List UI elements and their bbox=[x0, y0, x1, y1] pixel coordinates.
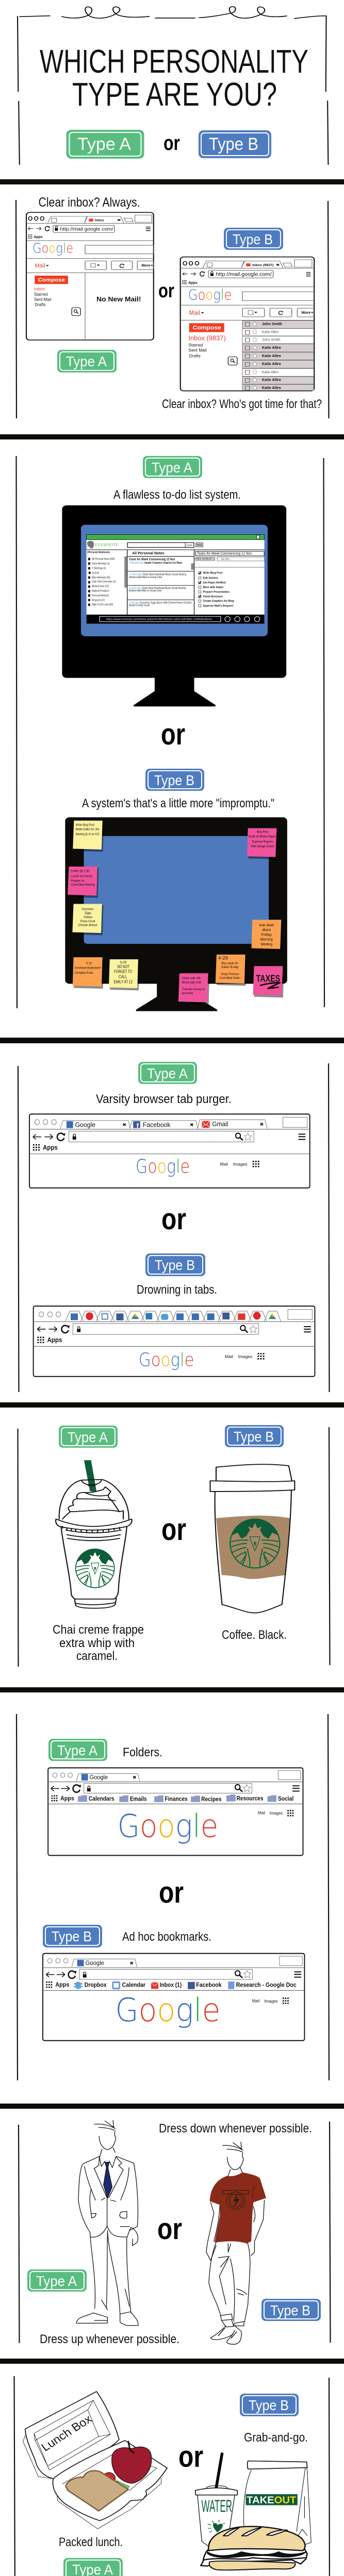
email rows: Katie Allen bbox=[262, 353, 281, 358]
email rows: John Smith bbox=[262, 337, 281, 342]
browser: clean gmail inbox: Inbox bbox=[34, 286, 45, 291]
browser: folders bookmark bar: Recipes bbox=[201, 1796, 222, 1803]
browser: ad hoc bookmark bar: Google bbox=[85, 1960, 104, 1967]
sub sandwich bbox=[201, 2527, 307, 2570]
water cup: WATER bbox=[202, 2497, 232, 2516]
sticky note: yellow groceries: Eggs bbox=[85, 911, 91, 915]
browser: clean gmail inbox: Drafts bbox=[35, 302, 46, 307]
sticky note: pink pay stub: accounts bbox=[182, 991, 193, 995]
browser: three tabs bbox=[29, 1114, 310, 1188]
browser: folders bookmark bar: Mail bbox=[258, 1810, 265, 1816]
browser: many tabs: Google bbox=[139, 1350, 194, 1371]
note list: Clean Desk Download Music Social Sharing bbox=[142, 587, 186, 590]
badge: Type A tabs bbox=[138, 1062, 197, 1084]
or: or bbox=[159, 1876, 184, 1909]
badge: Type A dress: Type A bbox=[36, 2273, 77, 2289]
sticky note: orange brainstorm: 4-15 bbox=[86, 961, 92, 965]
open note checklist: Write Blog Post bbox=[203, 572, 222, 575]
bookmark folders bbox=[78, 1794, 276, 1802]
badge: Type A inbox: Type A bbox=[66, 353, 107, 369]
badge: Type B lunch: Type B bbox=[249, 2397, 289, 2413]
badge: Type A to-do bbox=[143, 456, 202, 478]
browser: ad hoc bookmark bar: Inbox (1) bbox=[160, 1982, 182, 1989]
or: or bbox=[158, 280, 174, 302]
sticky note: pink pay stub: Check with HR bbox=[182, 976, 201, 980]
browser: many tabs: Mail bbox=[225, 1354, 233, 1359]
badge: Type A inbox bbox=[57, 350, 117, 372]
title bbox=[40, 43, 308, 113]
sticky note: orange karen: Buy cards for bbox=[222, 961, 238, 965]
sticky note: yellow do not forget: FORGET TO bbox=[114, 969, 132, 974]
open note checklist: Main Notebook ∨ bbox=[196, 557, 214, 561]
header badge: Type A: Type A bbox=[77, 134, 131, 154]
browser: folders bookmark bar: Finances bbox=[165, 1795, 188, 1803]
open note checklist: Tasks for Week Commencing 12 Nov bbox=[197, 551, 252, 555]
sidebar notebooks: Research (47) bbox=[92, 599, 105, 602]
or: or bbox=[161, 1202, 186, 1236]
browser: overflowing gmail inbox bbox=[181, 257, 314, 391]
note list: Buttons Add Mike to Group Chat bbox=[129, 576, 162, 579]
browser: folders bookmark bar: Social bbox=[278, 1795, 293, 1802]
sticky note: orange ask matt: Meeting bbox=[261, 942, 272, 946]
sticky note: yellow blog: Write Blog Post bbox=[76, 822, 95, 827]
sticky note: pink taxes bbox=[253, 966, 284, 997]
badge: Type B lunch bbox=[240, 2394, 299, 2416]
sticky note: yellow do not forget: 5-09 bbox=[120, 961, 126, 964]
badge: Type A lunch bbox=[63, 2558, 123, 2576]
illustration: frappe cup bbox=[56, 1460, 132, 1608]
tab favicons bbox=[71, 1312, 276, 1320]
browser: folders bookmark bar: Emails bbox=[130, 1795, 147, 1803]
sticky note: orange ask matt bbox=[252, 920, 283, 951]
browser: three tabs: Google bbox=[75, 1121, 95, 1128]
browser: folders bookmark bar: Images bbox=[270, 1811, 283, 1816]
badge: Type A tabs: Type A bbox=[147, 1065, 188, 1081]
browser: overflowing gmail inbox: Google bbox=[188, 287, 232, 303]
caption: dress up: Dress up whenever possible. bbox=[40, 2332, 179, 2346]
sticky note: yellow do not forget: CALL bbox=[119, 974, 127, 979]
illustration: lunch box: Lunch Box bbox=[39, 2412, 94, 2454]
note list: Bread Crumbs Sushi bbox=[129, 604, 150, 607]
sticky note: yellow groceries bbox=[72, 904, 103, 935]
sticky note: yellow do not forget bbox=[109, 959, 140, 990]
sticky note: yellow blog bbox=[73, 821, 104, 852]
browser: overflowing gmail inbox: Compose bbox=[193, 325, 221, 331]
caption: chai creme frappe: caramel. bbox=[76, 1649, 118, 1663]
badge: Type B to-do bbox=[145, 769, 204, 791]
header or: or bbox=[163, 132, 180, 155]
browser: folders bookmark bar: Apps bbox=[60, 1795, 74, 1802]
email rows: Katie Allen bbox=[262, 369, 279, 374]
sticky note: yellow groceries: Chicken Breast bbox=[78, 923, 97, 927]
badge: Type B bookmarks: Type B bbox=[52, 1928, 92, 1944]
monitor: evernote: https://www.evernote.com/Home.action#n=851e8eeee-a3e6-41ff-866c-2e9658a45e4a bbox=[106, 618, 212, 621]
browser: folders bookmark bar: Google bbox=[118, 1808, 218, 1845]
note list: All Personal Notes bbox=[132, 551, 165, 555]
sidebar notebooks: IT Meetings (4) bbox=[92, 567, 106, 570]
browser: three tabs: Images bbox=[233, 1162, 247, 1166]
note list bbox=[127, 551, 194, 607]
browser: clean gmail inbox bbox=[26, 212, 154, 340]
sidebar notebooks: Personal Notes(2) bbox=[92, 595, 109, 597]
caption: chai creme frappe: extra whip with bbox=[59, 1636, 135, 1650]
browser: three tabs: Mail bbox=[220, 1162, 228, 1166]
sticky note: pink pay stub: about pay stub bbox=[182, 980, 201, 984]
illustration: lunch box bbox=[23, 2392, 167, 2529]
header frame bbox=[18, 7, 328, 164]
sidebar notebooks: Media Events (79) bbox=[92, 585, 109, 588]
sticky note: yellow groceries: Cheese bbox=[84, 915, 92, 919]
browser: three tabs: f bbox=[137, 1122, 139, 1130]
inbox caption: type A: Clear inbox? Always. bbox=[38, 195, 140, 210]
takeout bag: TAKEOUT bbox=[247, 2495, 296, 2506]
browser: many tabs: Apps bbox=[47, 1336, 62, 1344]
caption: folders: Folders. bbox=[123, 1745, 162, 1759]
browser: clean gmail inbox: Inbox bbox=[95, 218, 104, 222]
sidebar notebooks: National Freelance bbox=[92, 590, 109, 592]
badge: Type A to-do: Type A bbox=[152, 460, 192, 476]
browser: folders bookmark bar: Calendars bbox=[89, 1795, 114, 1802]
browser: overflowing gmail inbox: Drafts bbox=[189, 353, 201, 359]
caption: dress down: Dress down whenever possible. bbox=[159, 2122, 312, 2136]
sticky note: orange ask matt: about bbox=[262, 928, 271, 932]
browser: ad hoc bookmark bar: Images bbox=[265, 1999, 278, 2004]
badge: Type A folders: Type A bbox=[57, 1742, 97, 1758]
open note checklist: Create Graphics for Blog bbox=[203, 600, 234, 603]
takeout bag bbox=[243, 2461, 311, 2545]
browser: ad hoc bookmark bar: Calendar bbox=[122, 1982, 145, 1989]
badge: Type B coffee: Type B bbox=[234, 1429, 274, 1445]
title: TYPE ARE YOU? bbox=[72, 76, 277, 113]
browser: overflowing gmail inbox: Mail bbox=[189, 310, 200, 316]
email rows: Katie Allen bbox=[262, 362, 281, 366]
browser: three tabs: Apps bbox=[43, 1144, 58, 1151]
badge: Type A dress bbox=[27, 2269, 87, 2292]
open note checklist: Finish Brochure bbox=[203, 595, 223, 598]
sticky note: orange karen: Karen B-day bbox=[221, 965, 239, 969]
badge: Type A folders bbox=[48, 1739, 107, 1761]
browser: three tabs: Google bbox=[136, 1156, 190, 1178]
sidebar notebooks: Journal bbox=[92, 572, 99, 575]
sticky note: pink coffee bbox=[68, 867, 99, 898]
sidebar notebooks: Chair Field Committee (4) bbox=[92, 581, 116, 583]
browser: clean gmail inbox: Sent Mail bbox=[34, 297, 51, 302]
caption: flawless to-do: A flawless to-do list system. bbox=[113, 488, 241, 502]
monitor: evernote: Search bbox=[186, 544, 192, 547]
browser: ad hoc bookmark bar bbox=[43, 1954, 304, 2041]
sticky note: pink white paper: Blog Post bbox=[257, 829, 268, 834]
badge: Type B to-do: Type B bbox=[154, 772, 194, 788]
browser: overflowing gmail inbox: http://mail.google.com/ bbox=[216, 272, 272, 277]
caption: packed lunch: Packed lunch. bbox=[59, 2535, 123, 2549]
sticky note: pink pay stub: Transfer money to bbox=[182, 987, 205, 991]
illustration: man in suit bbox=[76, 2121, 138, 2326]
note list: Groceries: Eggs Bacon Milk Cheese Ranch Chicken bbox=[140, 602, 192, 604]
browser: folders bookmark bar bbox=[48, 1768, 303, 1855]
sticky note: pink coffee: Coffee @ 2:30 bbox=[71, 869, 89, 873]
sticky note: yellow groceries: Groceries bbox=[81, 907, 94, 911]
browser: overflowing gmail inbox: Inbox (9837) bbox=[188, 334, 226, 342]
note list: 2 Hours Ago bbox=[129, 573, 141, 576]
badge: Type B dress bbox=[261, 2299, 321, 2321]
sticky note: yellow blog: Meeting @ 10 w/ ICG bbox=[76, 832, 100, 836]
note list: Tasks for Week Commencing 12 Nov bbox=[129, 558, 175, 562]
sticky note: pink white paper bbox=[247, 828, 278, 859]
browser: overflowing gmail inbox: More bbox=[301, 310, 311, 315]
sidebar notebooks: ▾Personal Notebooks bbox=[87, 551, 110, 554]
sticky note: orange ask matt: Morning bbox=[260, 937, 273, 941]
badge: Type B inbox: Type B bbox=[233, 231, 273, 247]
sticky note: orange brainstorm bbox=[73, 957, 104, 989]
sticky note: pink white paper: Web Design Check bbox=[251, 844, 274, 848]
browser: clean gmail inbox: Apps bbox=[34, 234, 43, 239]
illustration: black coffee cup bbox=[210, 1464, 294, 1613]
sidebar notebooks: All Personal Notes (400) bbox=[92, 558, 114, 561]
open note checklist bbox=[194, 551, 265, 607]
sticky note: pink coffee: Committee Meeting bbox=[71, 883, 95, 887]
sticky note: pink coffee: Lunch w/ Fanny bbox=[71, 874, 92, 878]
email rows: John Smith bbox=[262, 321, 282, 326]
sticky note: yellow groceries: Pizza Crust bbox=[80, 919, 95, 923]
or: or bbox=[157, 2212, 182, 2246]
sidebar notebooks: Daily To-Do Lists (50) bbox=[92, 603, 113, 606]
email rows: Katie Allen bbox=[262, 385, 281, 390]
browser: clean gmail inbox: Starred bbox=[34, 292, 47, 297]
monitor: evernote: Done bbox=[197, 544, 202, 547]
caption: tab purger: Varsity browser tab purger. bbox=[96, 1092, 232, 1106]
or: or bbox=[178, 2440, 203, 2473]
note list: Update Computer Organize Car Wash bbox=[144, 562, 182, 565]
sticky note: orange brainstorm: Schedule Brainstorm bbox=[75, 965, 101, 970]
email rows bbox=[242, 320, 314, 391]
header badge: Type B bbox=[199, 130, 271, 158]
browser: many tabs bbox=[34, 1306, 315, 1377]
caption: drowning in tabs: Drowning in tabs. bbox=[137, 1283, 217, 1297]
badge: Type A coffee: Type A bbox=[68, 1429, 108, 1445]
or: or bbox=[161, 718, 185, 751]
browser: overflowing gmail inbox: Apps bbox=[188, 280, 198, 285]
sticky note: orange karen: Committee Notes bbox=[219, 976, 240, 980]
browser: folders bookmark bar: Google bbox=[90, 1774, 108, 1781]
illustration: casual man bbox=[206, 2142, 266, 2344]
sticky note: yellow do not forget: DO NOT bbox=[118, 964, 129, 969]
bookmark icons bbox=[74, 1981, 234, 1989]
browser: clean gmail inbox: Compose bbox=[38, 278, 65, 283]
water cup bbox=[195, 2454, 237, 2548]
sticky note: orange brainstorm: Complete Evals bbox=[75, 970, 93, 975]
browser: ad hoc bookmark bar: Dropbox bbox=[85, 1982, 107, 1989]
browser: many tabs: Images bbox=[238, 1354, 252, 1359]
sticky note: orange karen: Study Previous bbox=[221, 972, 239, 976]
email rows: Katie Allen bbox=[262, 378, 281, 382]
browser: overflowing gmail inbox: Sent Mail bbox=[188, 348, 207, 353]
badge: Type B dress: Type B bbox=[270, 2302, 310, 2318]
browser: ad hoc bookmark bar: Google bbox=[115, 1991, 221, 2029]
caption: impromptu: A system's that's a little more "impromptu." bbox=[82, 796, 274, 810]
badge: Type A coffee bbox=[59, 1426, 118, 1448]
browser: ad hoc bookmark bar: Mail bbox=[252, 1998, 260, 2004]
caption: chai creme frappe bbox=[53, 1623, 144, 1663]
badge: Type B coffee bbox=[225, 1425, 284, 1447]
browser: ad hoc bookmark bar: Facebook bbox=[196, 1982, 222, 1989]
note list: Clean Desk Download Music Social Sharing bbox=[142, 573, 186, 576]
browser: clean gmail inbox: Mail bbox=[35, 262, 45, 269]
monitor: evernote: EVERNOTE bbox=[95, 542, 118, 547]
browser: three tabs: Gmail bbox=[212, 1121, 228, 1128]
caption: grab and go: Grab-and-go. bbox=[244, 2431, 308, 2445]
note list: 3 Minutes Ago bbox=[129, 562, 144, 565]
open note checklist: Edit Articles bbox=[203, 577, 218, 580]
badge: Type B tabs: Type B bbox=[155, 1257, 195, 1273]
browser: ad hoc bookmark bar: Research - Google Doc bbox=[236, 1982, 297, 1989]
browser: overflowing gmail inbox: Starred bbox=[188, 343, 203, 348]
sticky note: pink pay stub bbox=[178, 973, 209, 1005]
badge: Type B bookmarks bbox=[43, 1925, 102, 1947]
caption: ad hoc bookmarks: Ad hoc bookmarks. bbox=[122, 1930, 211, 1944]
sticky note: pink coffee: Prepare for bbox=[71, 878, 85, 883]
header badge: Type A bbox=[66, 130, 144, 159]
badge: Type B inbox bbox=[224, 228, 283, 250]
badge: Type B tabs bbox=[145, 1253, 205, 1276]
open note checklist: Get Paper Refilled bbox=[203, 582, 226, 584]
browser: folders bookmark bar: Resources bbox=[237, 1795, 264, 1802]
monitor: sticky notes bbox=[65, 817, 287, 1011]
browser: overflowing gmail inbox: Inbox (9837) bbox=[252, 263, 274, 267]
email rows: Katie Allen bbox=[262, 330, 279, 334]
browser: ad hoc bookmark bar: Apps bbox=[55, 1981, 70, 1988]
sticky note: pink white paper: Expense Reports bbox=[252, 839, 273, 843]
note list: Buttons Add Mike to Group Chat bbox=[129, 589, 161, 592]
sidebar notebooks: Main Notebook (54) bbox=[92, 577, 110, 579]
sticky note: orange karen: 4-29 bbox=[218, 956, 228, 961]
browser: three tabs: Facebook bbox=[143, 1121, 171, 1128]
sticky note: orange karen bbox=[216, 955, 247, 986]
t-shirt graphic bbox=[223, 2190, 249, 2209]
email rows: Katie Allen bbox=[262, 345, 281, 350]
sticky note: yellow do not forget: EMILY AT 12 bbox=[113, 979, 133, 984]
open note checklist: Meet with Adam bbox=[203, 586, 223, 589]
note list: 1 Day Ago bbox=[129, 602, 139, 604]
header badge: Type B: Type B bbox=[209, 134, 258, 154]
open note checklist: Approve Matt's Request bbox=[203, 604, 233, 607]
sticky note: orange ask matt: Ask Matt bbox=[259, 923, 274, 927]
sidebar notebooks: Client Meetings (3) bbox=[92, 563, 110, 565]
sticky note: pink white paper: Draft of White Paper bbox=[249, 834, 276, 838]
sticky note: yellow blog: Make Edits for Jim bbox=[76, 827, 100, 832]
browser: clean gmail inbox: No New Mail! bbox=[96, 296, 141, 303]
or: or bbox=[161, 1512, 186, 1547]
open note checklist: Prepare Presentation bbox=[203, 591, 230, 594]
sidebar notebooks bbox=[87, 551, 116, 606]
note list: 3 Hours Ago bbox=[129, 587, 141, 590]
browser: clean gmail inbox: http://mail.google.com/ bbox=[60, 226, 113, 232]
caption: coffee black: Coffee. Black. bbox=[222, 1628, 287, 1642]
open note checklist: Set URL... bbox=[221, 558, 231, 561]
browser: clean gmail inbox: Google bbox=[32, 241, 73, 257]
caption: chai creme frappe: Chai creme frappe bbox=[53, 1623, 144, 1637]
sticky note: pink taxes: TAXES bbox=[256, 974, 280, 984]
sticky note: orange ask matt: Friday bbox=[261, 933, 272, 937]
monitor: evernote bbox=[62, 505, 286, 706]
browser: clean gmail inbox: More bbox=[141, 263, 151, 267]
illustration: takeout lunch bbox=[195, 2454, 311, 2570]
